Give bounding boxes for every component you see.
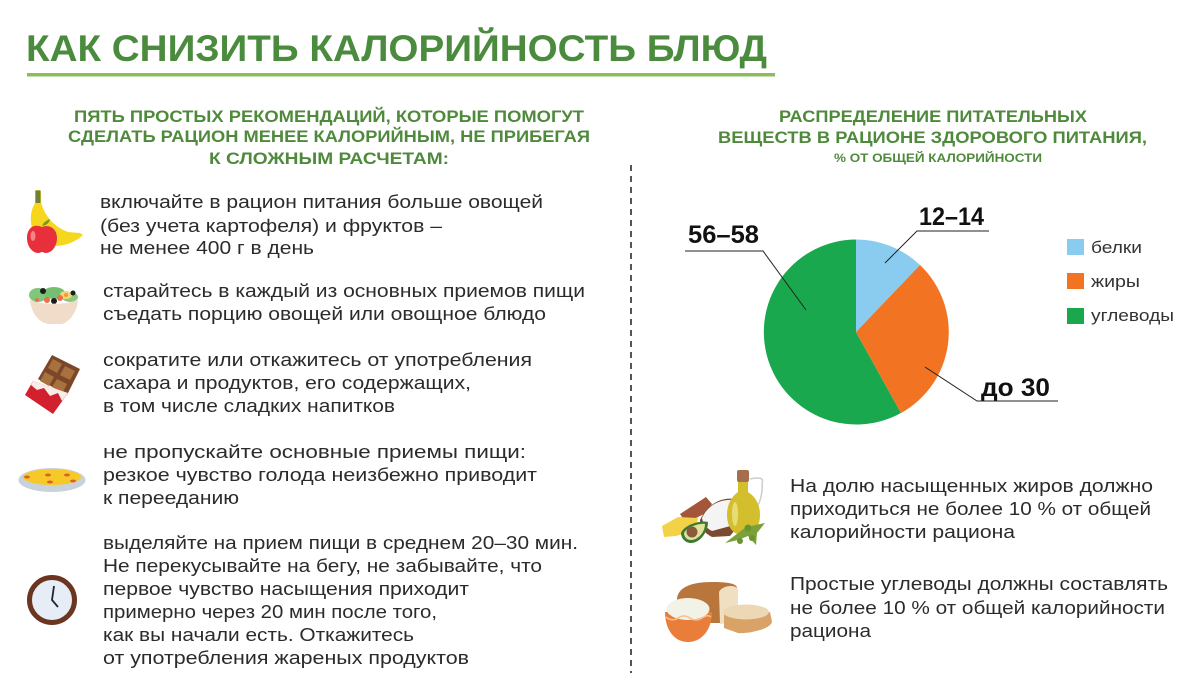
- legend: жиры: [1091, 273, 1140, 291]
- text: recommendation 3: [103, 350, 532, 416]
- text: recommendation 5: [103, 533, 578, 668]
- label: до 30: [925, 367, 1058, 402]
- text: recommendation 2: старайтесь в каждый из основных приемов пищи: [103, 281, 585, 301]
- text: recommendation 4: [103, 442, 537, 508]
- text: saturated fats: На долю насыщенных жиров должно: [790, 476, 1153, 496]
- legend: углеводы: [1091, 307, 1174, 325]
- heading: recommendations: [68, 107, 590, 168]
- text: recommendation 5: Не перекусывайте на бегу, не забывайте, что: [103, 556, 542, 576]
- text: recommendation 5: выделяйте на прием пищи в среднем 20–30 мин.: [103, 533, 578, 553]
- text: saturated fats: [790, 476, 1153, 542]
- text: simple carbohydrates: Простые углеводы должны составлять: [790, 574, 1168, 594]
- icon: chocolate bar: [25, 355, 80, 414]
- text: recommendation 2: [103, 281, 585, 324]
- text: simple carbohydrates: рациона: [790, 621, 872, 641]
- heading: nutrient distribution: % ОТ ОБЩЕЙ КАЛОРИЙНОСТИ: [834, 152, 1042, 165]
- text: recommendation 1: не менее 400 г в день: [100, 238, 314, 258]
- text: recommendation 5: от употребления жареных продуктов: [103, 648, 469, 668]
- heading: recommendations: К СЛОЖНЫМ РАСЧЕТАМ:: [209, 149, 449, 168]
- slice: proteins: [856, 239, 920, 332]
- text: recommendation 1: включайте в рацион питания больше овощей: [100, 192, 543, 212]
- text: simple carbohydrates: [790, 574, 1168, 641]
- pie chart: [764, 239, 949, 424]
- slice: fats: [856, 265, 949, 413]
- text: recommendation 3: в том числе сладких напитков: [103, 396, 395, 416]
- heading: nutrient distribution: ВЕЩЕСТВ В РАЦИОНЕ ЗДОРОВОГО ПИТАНИЯ,: [718, 128, 1147, 147]
- title: КАК СНИЗИТЬ КАЛОРИЙНОСТЬ БЛЮД: [26, 27, 767, 69]
- heading: nutrient distribution: [718, 107, 1147, 165]
- text: recommendation 3: сократите или откажитесь от употребления: [103, 350, 532, 370]
- label: 12–14: [885, 203, 989, 263]
- label: 56–58: [685, 221, 806, 310]
- text: recommendation 1: [100, 192, 543, 258]
- text: recommendation 4: к перееданию: [103, 488, 239, 508]
- text: recommendation 4: не пропускайте основные приемы пищи:: [103, 442, 526, 462]
- icon: clock: [30, 578, 74, 622]
- label: 12–14: 12–14: [919, 203, 984, 231]
- heading: recommendations: ПЯТЬ ПРОСТЫХ РЕКОМЕНДАЦИЙ, КОТОРЫЕ ПОМОГУТ: [74, 107, 585, 126]
- text: saturated fats: калорийности рациона: [790, 522, 1016, 542]
- text: saturated fats: приходиться не более 10 % от общей: [790, 499, 1151, 519]
- heading: recommendations: СДЕЛАТЬ РАЦИОН МЕНЕЕ КАЛОРИЙНЫМ, НЕ ПРИБЕГАЯ: [68, 127, 590, 146]
- icon: banana and apple: [27, 190, 83, 253]
- text: recommendation 5: как вы начали есть. Откажитесь: [103, 625, 414, 645]
- text: simple carbohydrates: не более 10 % от общей калорийности: [790, 598, 1165, 618]
- text: recommendation 5: примерно через 20 мин после того,: [103, 602, 437, 622]
- text: recommendation 2: съедать порцию овощей или овощное блюдо: [103, 304, 546, 324]
- legend: белки: [1091, 239, 1142, 257]
- icon: salad bowl: [29, 287, 78, 324]
- heading: nutrient distribution: РАСПРЕДЕЛЕНИЕ ПИТАТЕЛЬНЫХ: [779, 107, 1088, 126]
- slice: carbohydrates: [764, 240, 901, 424]
- icon: fats (oil, coconut, avocado, bacon, butter): [662, 470, 765, 545]
- label: 56–58: 56–58: [688, 221, 759, 249]
- text: recommendation 1: (без учета картофеля) и фруктов –: [100, 216, 442, 236]
- text: recommendation 3: сахара и продуктов, его содержащих,: [103, 373, 471, 393]
- text: recommendation 4: резкое чувство голода неизбежно приводит: [103, 465, 537, 485]
- legend: [1067, 239, 1174, 325]
- icon: plate with omelette: [18, 468, 86, 492]
- icon: carbohydrates (bread and bowl): [665, 582, 772, 642]
- label: до 30: до 30: [981, 374, 1050, 402]
- text: recommendation 5: первое чувство насыщения приходит: [103, 579, 469, 599]
